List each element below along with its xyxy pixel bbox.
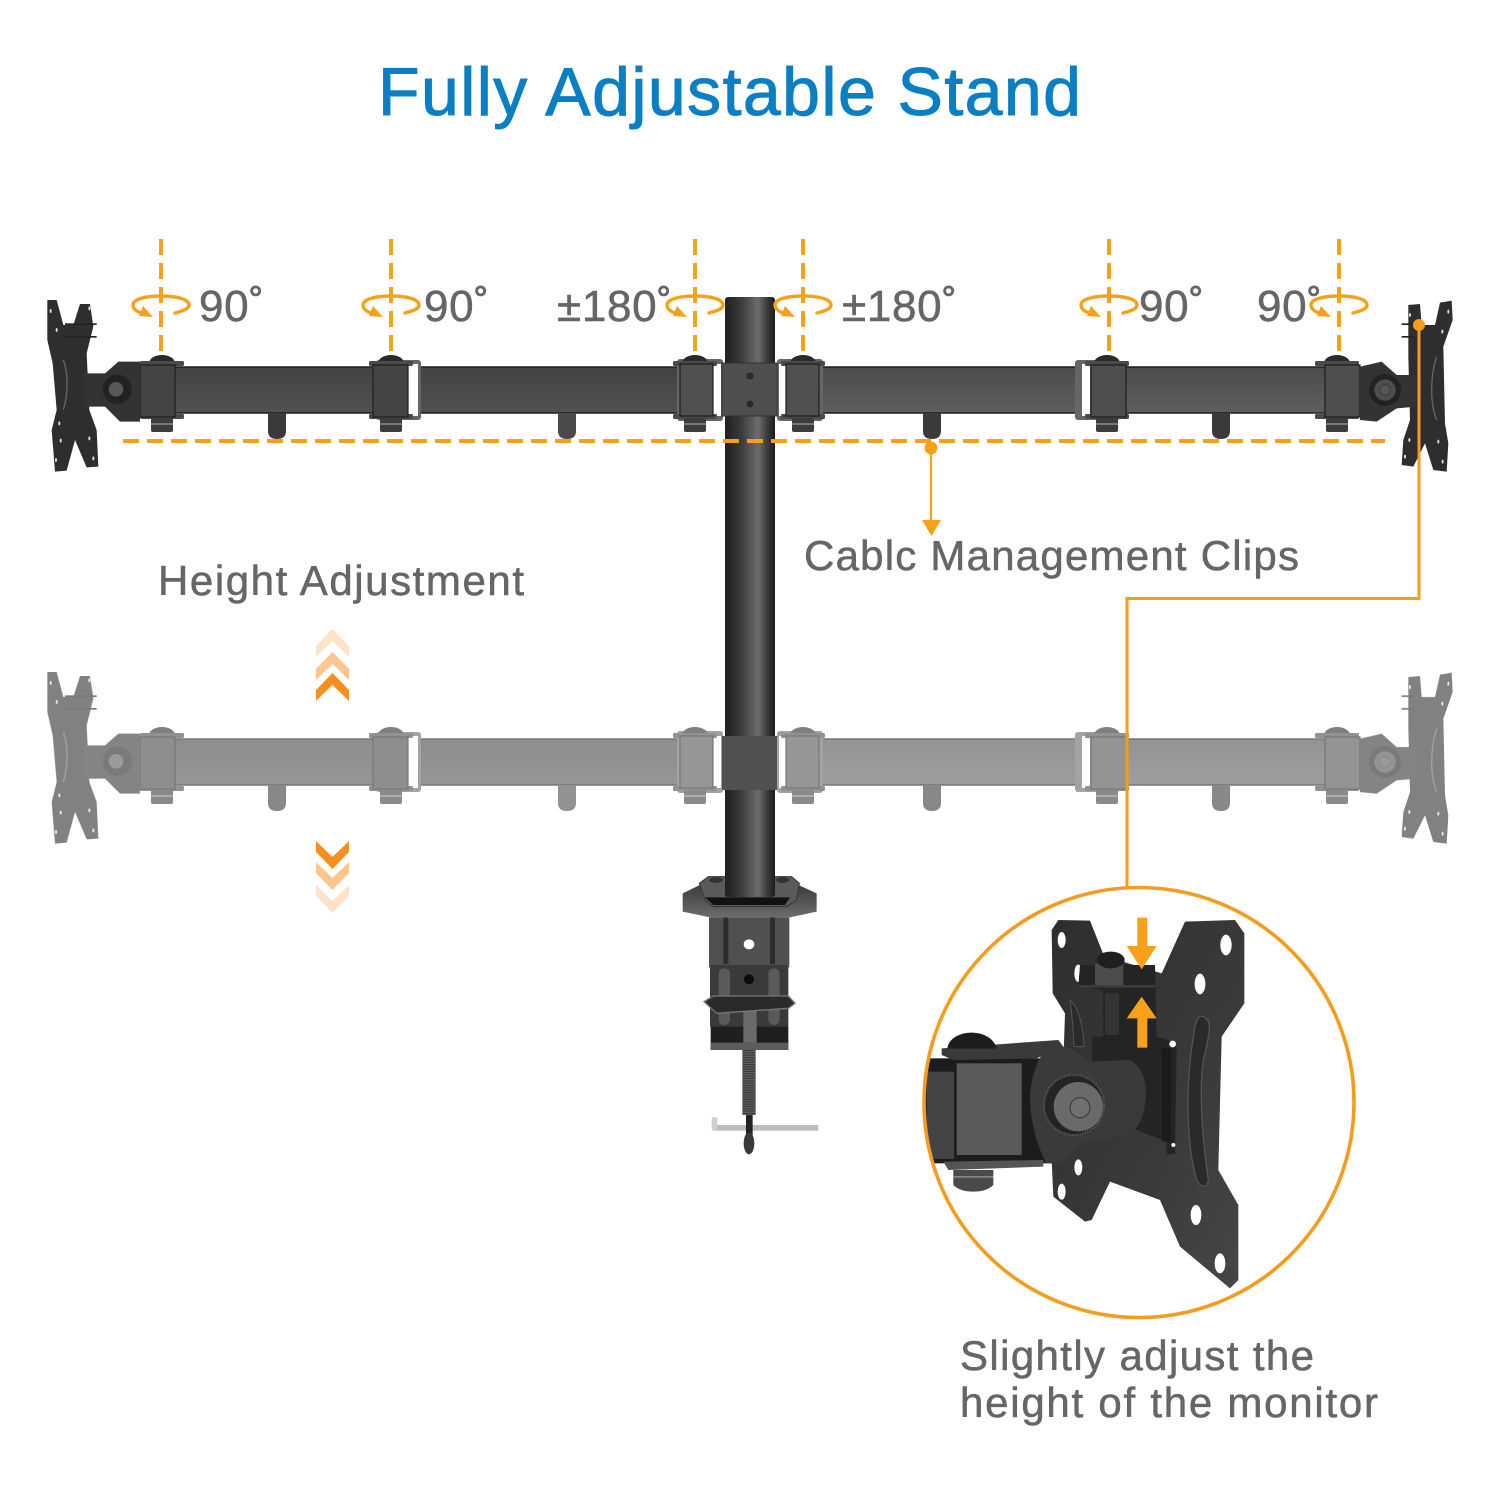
cable clip label: Cablc Management Clips xyxy=(804,532,1299,579)
detail caption: Slightly adjust the xyxy=(960,1332,1314,1379)
horizontal dashed clip line xyxy=(123,439,1385,443)
title: Fully Adjustable Stand xyxy=(378,54,1081,130)
clamp pressure plate xyxy=(704,996,795,1043)
connector line to detail xyxy=(1127,319,1425,888)
cable clip pointer xyxy=(922,442,941,536)
inset orange squeeze arrows xyxy=(1127,918,1157,1048)
clamp top flange xyxy=(683,877,817,917)
rotation labels xyxy=(199,282,1322,331)
tilt adjuster bracket xyxy=(1078,952,1177,1155)
detail caption xyxy=(960,1332,1378,1426)
rotation labels: ±180˚ xyxy=(557,282,672,331)
rotation labels: 90˚ xyxy=(1257,282,1322,331)
T handle xyxy=(712,1115,818,1154)
height up chevrons xyxy=(316,629,349,701)
vertical dashed rotation axes xyxy=(161,239,1339,352)
rotation arrows xyxy=(133,296,1367,317)
height adjustment label: Height Adjustment xyxy=(158,557,524,604)
inset arm section xyxy=(923,1033,1063,1192)
rotation labels: 90˚ xyxy=(424,282,489,331)
threaded screw xyxy=(742,1050,756,1115)
inset swivel hub xyxy=(1030,1047,1146,1163)
raised arm xyxy=(47,300,1453,472)
detail circle inset xyxy=(923,888,1354,1318)
rotation labels: ±180˚ xyxy=(842,282,957,331)
lowered arm mount plate xyxy=(722,736,777,790)
detail caption: height of the monitor xyxy=(960,1379,1378,1426)
VESA plate xyxy=(1052,920,1244,1288)
clamp body xyxy=(709,917,789,1050)
height down chevrons xyxy=(316,841,349,913)
rotation labels: 90˚ xyxy=(1139,282,1204,331)
centre mount plate xyxy=(722,363,777,416)
desk clamp xyxy=(683,877,818,1154)
rotation labels: 90˚ xyxy=(199,282,264,331)
lowered arm (ghost position) xyxy=(47,672,1453,844)
central pole xyxy=(722,297,777,897)
